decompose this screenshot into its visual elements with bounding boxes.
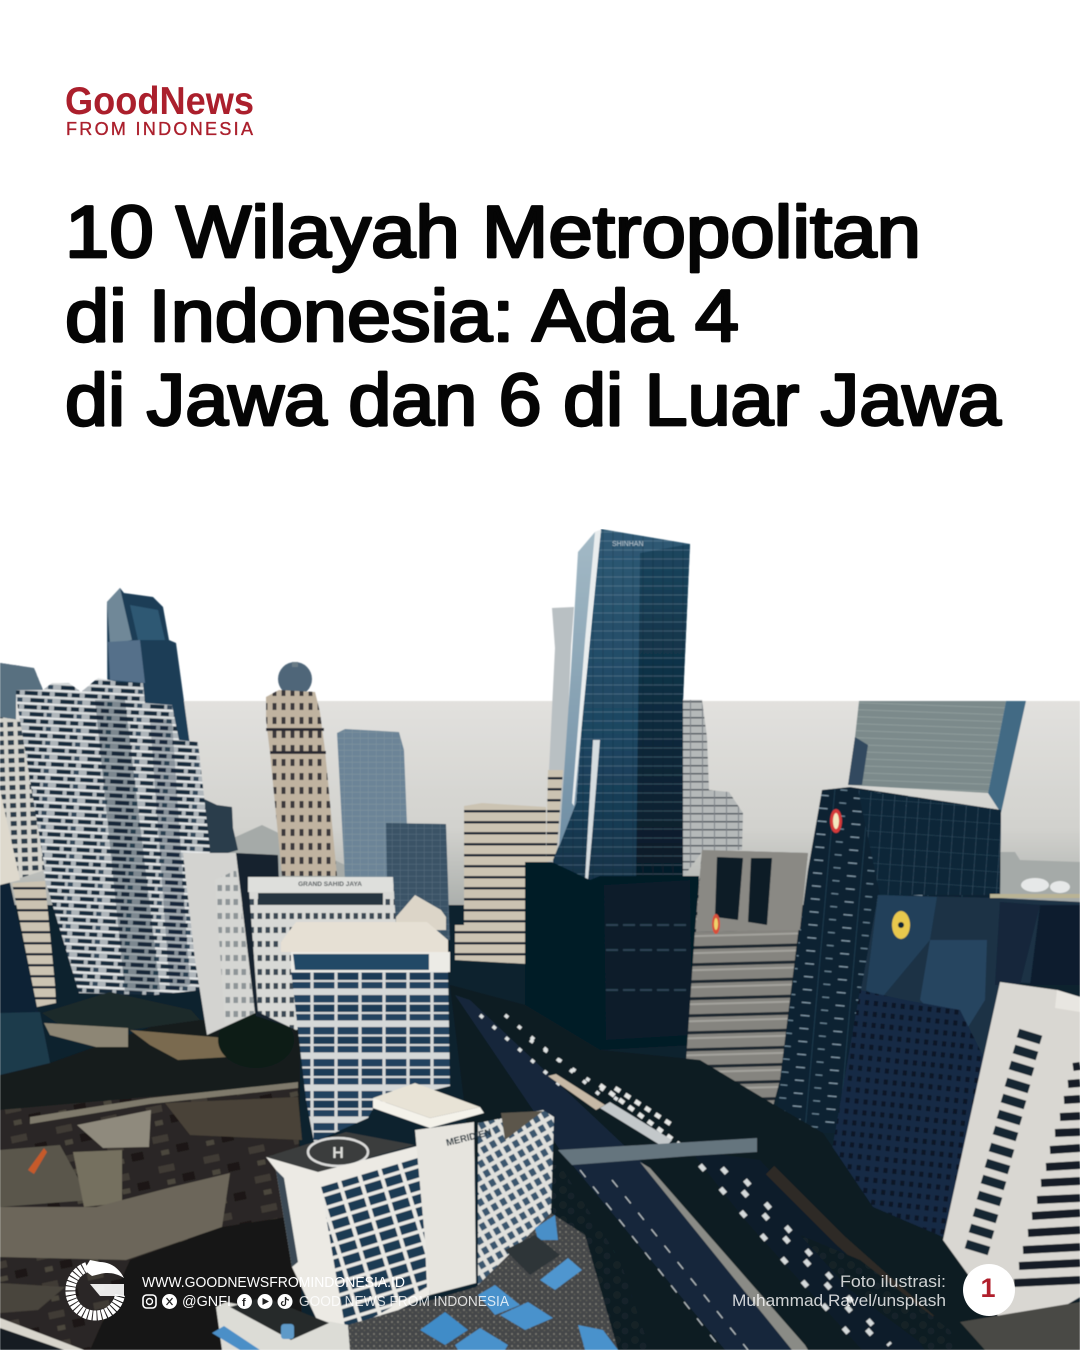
page number badge xyxy=(963,1264,1015,1316)
page number badge: 1 xyxy=(980,1273,996,1303)
roof garden with blue pyramids xyxy=(348,1213,618,1350)
Le Meridien hotel xyxy=(212,1083,554,1350)
footer logo: GNFI emblem xyxy=(70,1260,124,1316)
photo: Jakarta skyline xyxy=(0,529,1080,1350)
dark lower tower mass xyxy=(525,862,699,1050)
logo: GoodNews From Indonesia: FROM INDONESIA xyxy=(66,119,253,139)
footer social icons and handles: GOOD NEWS FROM INDONESIA xyxy=(299,1294,509,1310)
grand sahid building: GRAND SAHID JAYA xyxy=(298,881,362,888)
tree near hotel xyxy=(218,1012,294,1068)
main glass tower Shinhan xyxy=(553,529,690,1000)
grand sahid building xyxy=(248,877,446,1030)
Le Meridien hotel: H xyxy=(332,1145,344,1162)
dark glass tower right xyxy=(832,878,1080,1237)
busway shelter xyxy=(548,1074,605,1110)
photo credit: Foto ilustrasi: xyxy=(840,1273,946,1291)
logo: GoodNews From Indonesia xyxy=(65,80,254,139)
back thin tower xyxy=(546,607,574,863)
photo credit: Muhammad Ravel/unsplash xyxy=(732,1292,946,1310)
green-grey glass tower xyxy=(848,701,1026,813)
main glass tower Shinhan: SHINHAN xyxy=(612,541,644,548)
title: di Indonesia: Ada 4 xyxy=(65,276,739,357)
bottom right plaza xyxy=(960,1302,1080,1350)
pavilion xyxy=(42,992,228,1060)
footer social icons and handles: f xyxy=(242,1297,246,1309)
small buildings behind apartment xyxy=(200,797,238,860)
pedestrian bridge xyxy=(558,1138,757,1165)
dark tower top left xyxy=(107,588,200,860)
far left cream building xyxy=(0,717,45,880)
title: di Jawa dan 6 di Luar Jawa xyxy=(65,360,1001,441)
small left blue building xyxy=(0,1012,50,1075)
trees xyxy=(545,1165,650,1350)
striped tower centre xyxy=(455,803,546,965)
footer website text: WWW.GOODNEWSFROMINDONESIA.ID xyxy=(142,1275,405,1291)
sky band xyxy=(0,701,1080,911)
far tower between glass and beige xyxy=(681,700,743,880)
photo credit xyxy=(732,1273,946,1310)
logo: GoodNews From Indonesia: GoodNews xyxy=(65,80,254,123)
construction site xyxy=(0,1082,302,1350)
apartment block left xyxy=(0,663,210,995)
tan tower with dome xyxy=(266,662,337,876)
grand sahid slab xyxy=(183,853,284,1035)
road xyxy=(455,995,930,1350)
dark city base xyxy=(0,905,1080,1350)
white tower far right xyxy=(943,982,1080,1320)
beige office building xyxy=(685,850,808,1117)
blue window hotel xyxy=(281,922,450,1142)
footer social icons and handles xyxy=(143,1294,509,1310)
Le Meridien hotel: MERIDIEN xyxy=(445,1127,493,1149)
grey-blue glass tower xyxy=(337,729,407,880)
footer social icons and handles: @GNFI xyxy=(182,1294,231,1310)
distant haze city xyxy=(205,825,1080,905)
title: 10 Wilayah Metropolitan xyxy=(65,192,921,273)
darker glass annex xyxy=(386,823,450,940)
ground and lower city xyxy=(0,1020,300,1350)
dark glass far left base xyxy=(0,847,50,1080)
dark glass tower xyxy=(778,787,1001,1133)
title xyxy=(65,192,1001,441)
